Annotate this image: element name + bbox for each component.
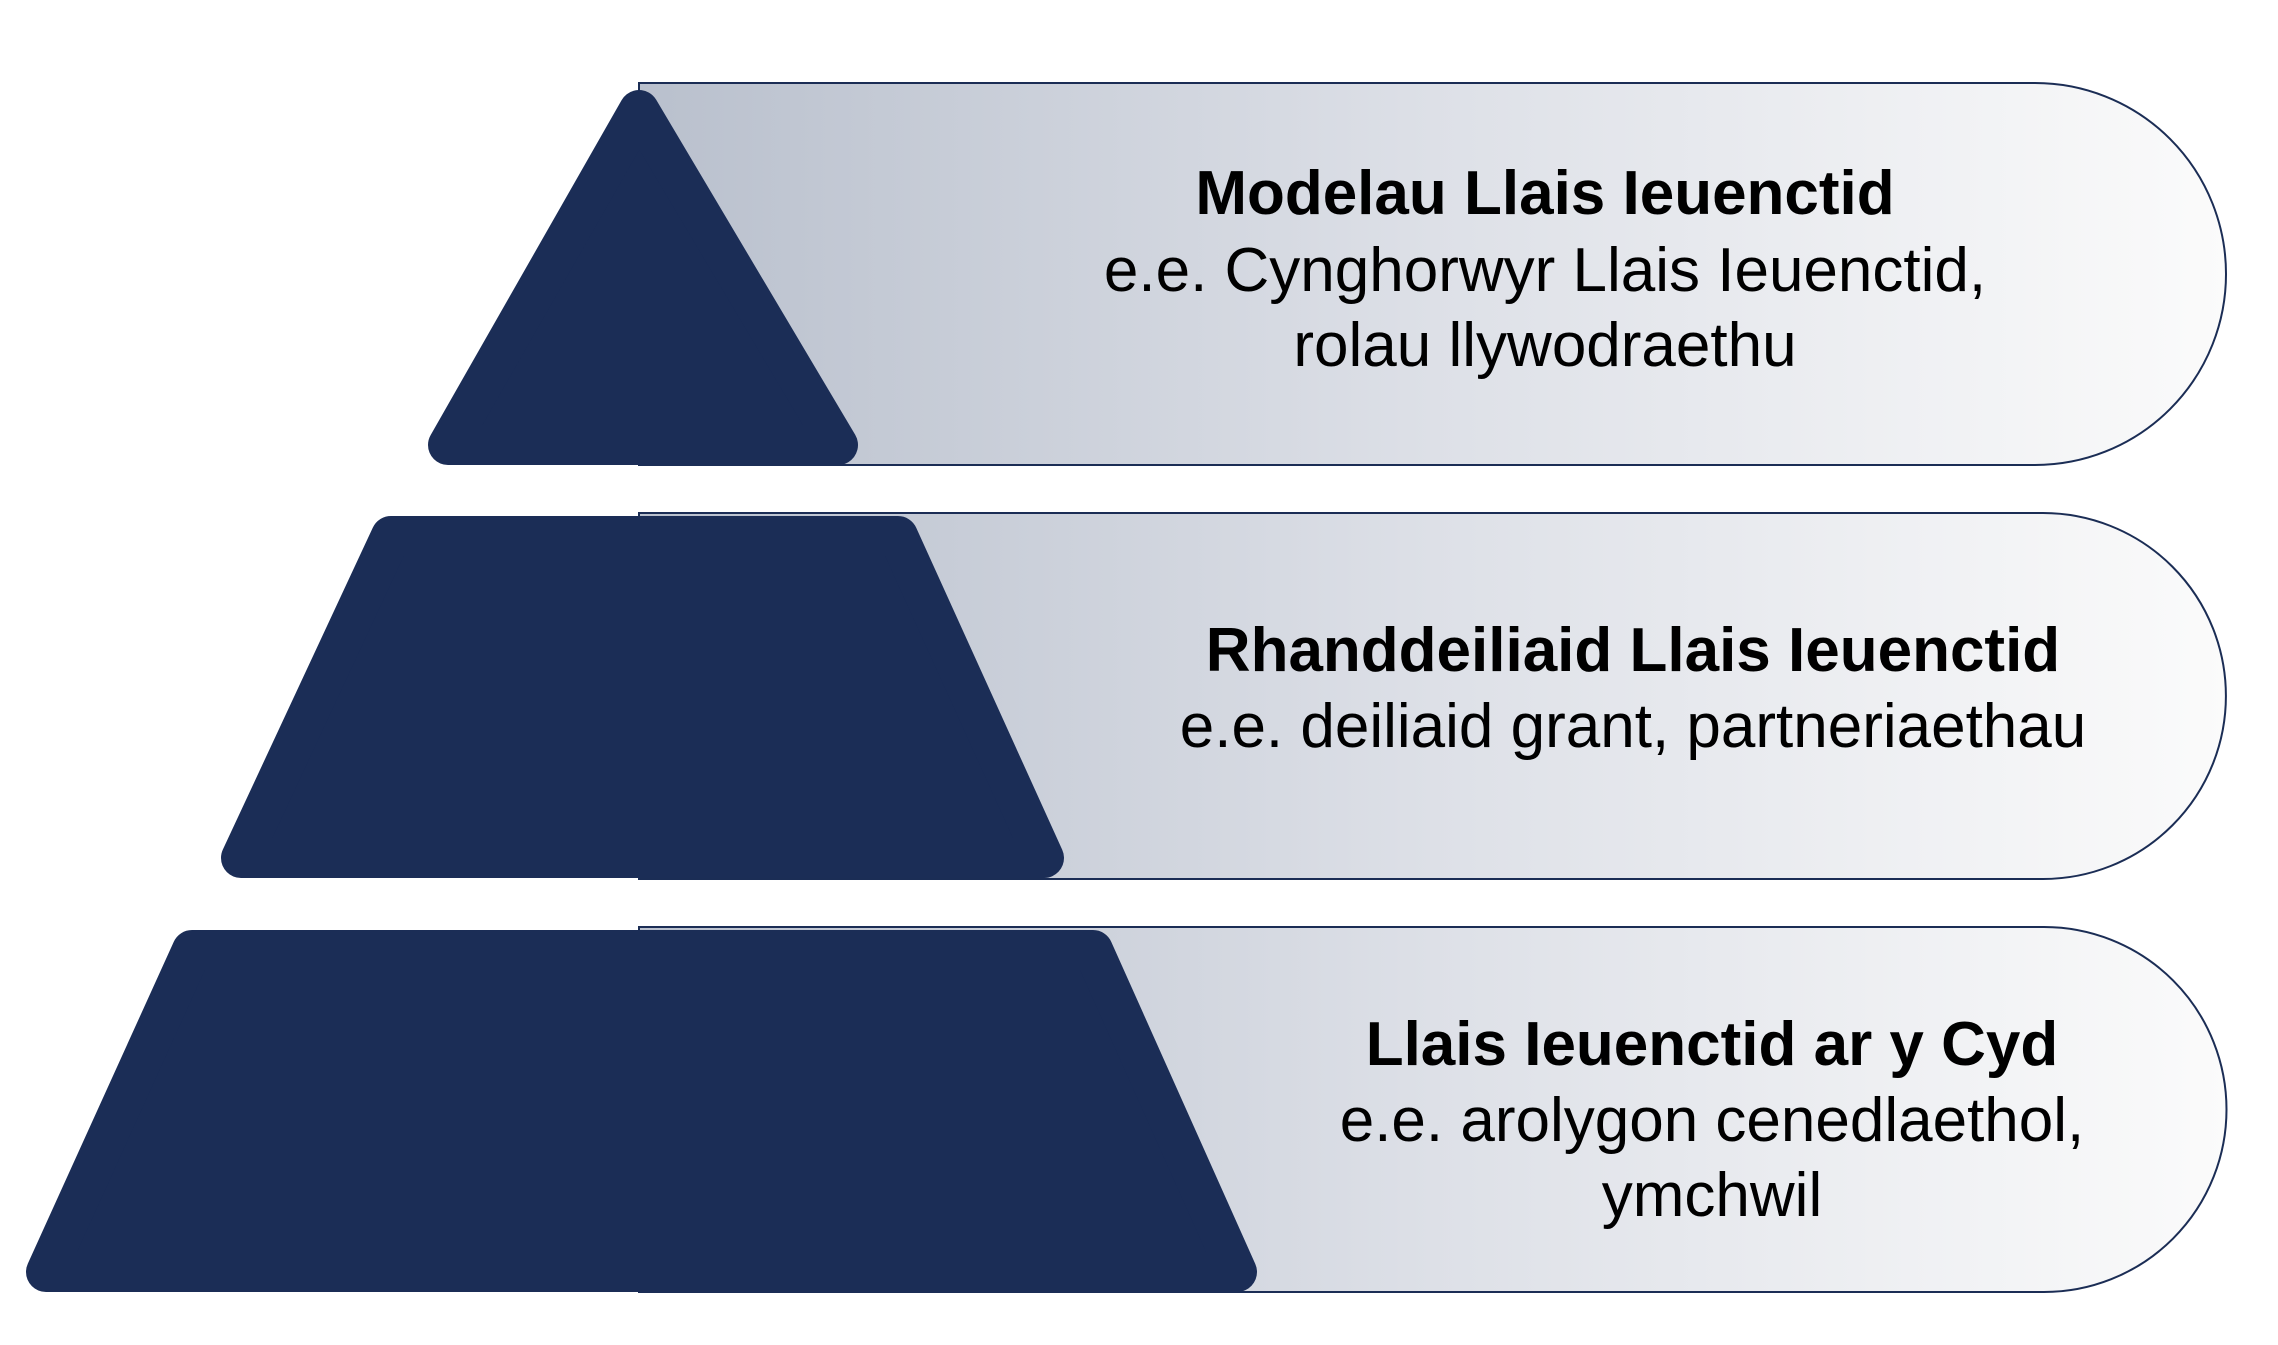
text 3: e.e. arolygon cenedlaethol,: [1340, 1086, 2084, 1155]
band 3: [639, 927, 2227, 1292]
tier 1: Modelau Llais Ieuenctid: [448, 83, 2226, 465]
text 3: Llais Ieuenctid ar y Cyd: [1366, 1010, 2058, 1079]
text 1: [1104, 159, 1986, 380]
text 2: e.e. deiliaid grant, partneriaethau: [1180, 692, 2086, 761]
text 1: e.e. Cynghorwyr Llais Ieuenctid,: [1104, 236, 1986, 305]
trapezoid 2: [241, 536, 1044, 858]
text 2: Rhanddeiliaid Llais Ieuenctid: [1206, 616, 2060, 685]
trapezoid 3: [46, 950, 1237, 1272]
band 1: [639, 83, 2226, 465]
text 1: Modelau Llais Ieuenctid: [1195, 159, 1895, 228]
text 2: [1180, 616, 2086, 761]
triangle 1: [448, 110, 838, 445]
band 2: [639, 513, 2226, 879]
text 1: rolau llywodraethu: [1293, 311, 1797, 380]
text 3: ymchwil: [1602, 1161, 1822, 1230]
tier 2: Rhanddeiliaid Llais Ieuenctid: [241, 513, 2226, 879]
text 3: [1340, 1010, 2084, 1230]
tier 3: Llais Ieuenctid ar y Cyd: [46, 927, 2227, 1292]
